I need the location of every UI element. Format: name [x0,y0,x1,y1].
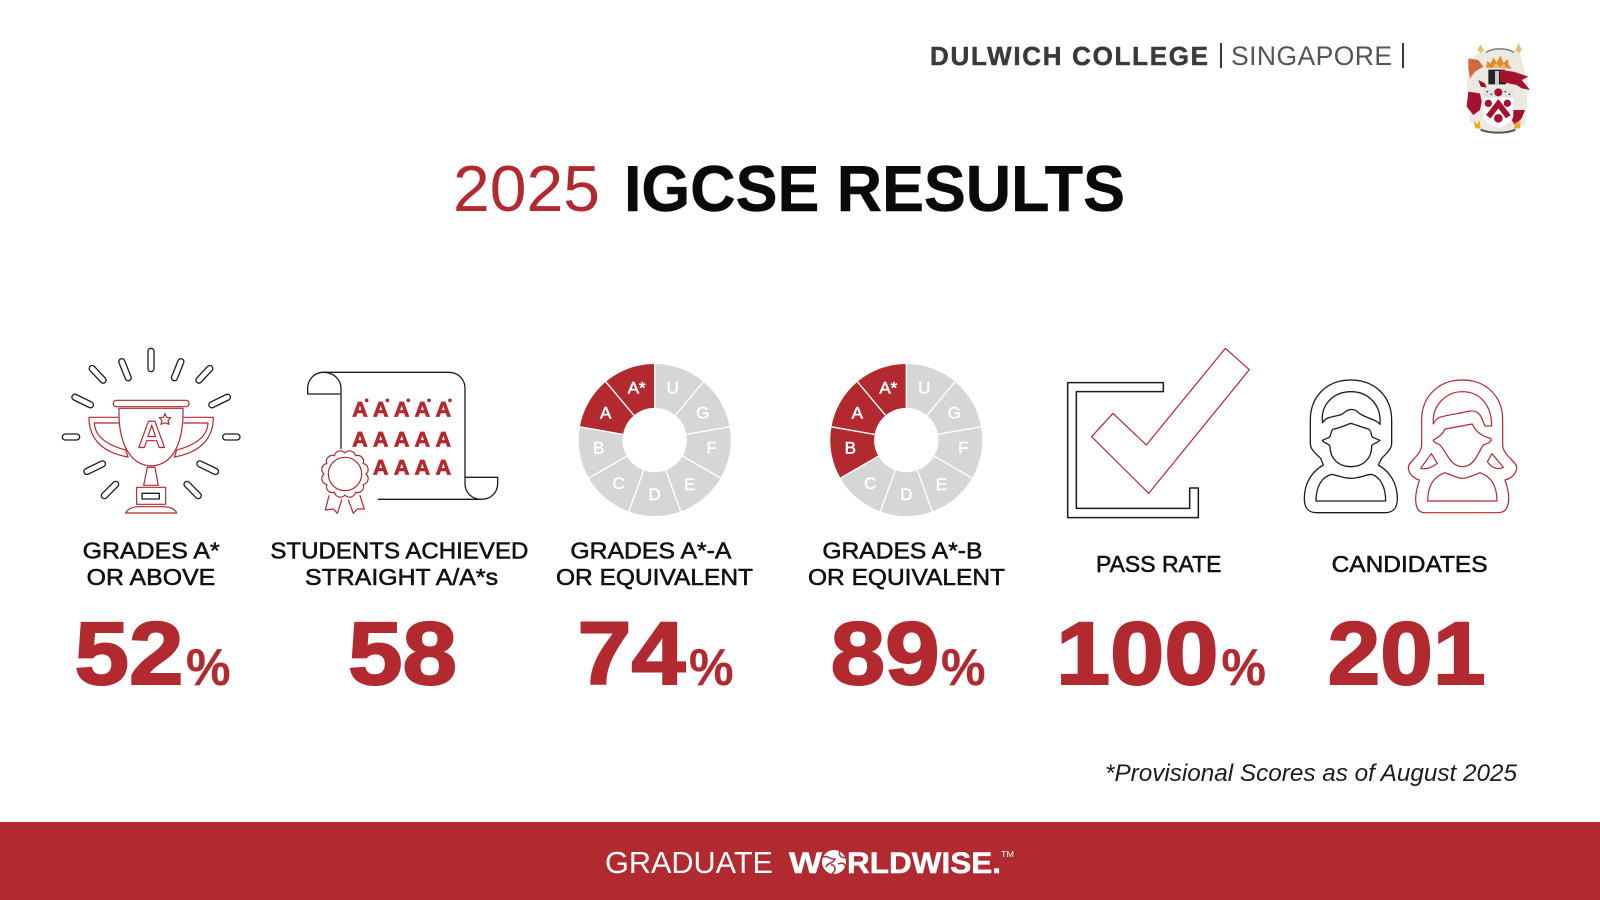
grid of A grades: A [352,428,368,452]
grid of A grades: A [373,398,388,422]
value: 89% [831,603,986,703]
label: students achieved straight A/A*s: STRAIGHT A/A*s [305,564,498,590]
chart: grade wheel A*, A and B highlighted: D [900,485,912,504]
header wordmark: Dulwich College Singapore: SINGAPORE [1231,41,1392,71]
chart: grade wheel A* and A highlighted: A [600,404,612,422]
chart: grade wheel A*, A and B highlighted: A [852,404,864,422]
value: 89%: 89 [831,603,940,703]
icon: male student [1304,380,1397,513]
grid of A grades: A [373,455,388,479]
rosette [322,451,368,513]
grid of A grades: A [436,398,451,422]
value: 100%: % [1221,639,1266,697]
footnote: *Provisional Scores as of August 2025 [1105,760,1518,787]
chart: grade wheel A* and A highlighted: D [649,485,661,504]
chart: grade wheel A* and A highlighted: B [593,438,604,458]
label: grades A* or above [83,538,220,590]
header wordmark: Dulwich College Singapore: DULWICH COLLEGE [930,41,1208,71]
grid of A grades: A [415,428,430,452]
value: 100%: 100 [1056,603,1218,703]
footer band: Graduate Worldwise [0,822,1600,900]
grid of A grades: A [436,428,451,452]
column: students achieved straight A/A*s [270,372,528,703]
column: pass rate [1056,348,1266,703]
label: grades A*-A or equivalent: GRADES A*-A [570,538,732,564]
icon: trophy with rays [62,348,240,513]
value: 201: 201 [1328,603,1486,703]
chart: grade wheel A* and A highlighted [578,363,731,517]
icon: school crest [1467,43,1530,133]
label: grades A*-A or equivalent [556,538,753,590]
chart: grade wheel A* and A highlighted: E [684,475,695,494]
icon: trophy with rays: A [138,413,166,456]
column: candidates [1304,380,1517,703]
value: 74%: % [689,639,734,697]
label: students achieved straight A/A*s: STUDENTS ACHIEVED [270,538,528,564]
title: 2025 [453,152,600,225]
grid of A grades: A [436,455,451,479]
label: grades A*-B or equivalent [808,538,1005,590]
chart: grade wheel A*, A and B highlighted: A* [879,378,898,398]
chart: grade wheel A* and A highlighted: F [707,438,717,458]
icon: female student [1408,380,1517,513]
value: 74% [578,603,734,703]
footer band: Graduate Worldwise: RLDWISE. [847,847,1001,880]
grid of A grades: A [352,398,368,422]
chart: grade wheel A* and A highlighted: C [613,474,625,493]
value: 52% [74,603,231,703]
column: grades A*-B or equivalent [808,363,1005,703]
chart: grade wheel A*, A and B highlighted: F [958,438,968,458]
grid of A grades: A [373,428,388,452]
icon: male and female students [1304,380,1517,513]
value: 52%: 52 [74,603,184,703]
icon: diploma scroll with rosette [308,372,498,513]
grid of A grades: A [394,428,409,452]
label: grades A* or above: OR ABOVE [87,564,215,590]
column: grades A*-A or equivalent [556,363,753,703]
value: 74%: 74 [578,603,686,703]
icon: check mark in box [1068,348,1249,518]
grid of A grades: A [415,398,430,422]
label: grades A* or above: GRADES A* [83,538,220,564]
icon: globe [822,850,846,874]
footer band: Graduate Worldwise: GRADUATE [605,845,773,880]
chart: grade wheel A*, A and B highlighted: E [936,475,947,494]
chart: grade wheel A* and A highlighted: A* [628,378,646,398]
label: grades A*-A or equivalent: OR EQUIVALENT [556,564,753,590]
title: IGCSE RESULTS [624,152,1125,225]
grid of A grades: A [415,455,430,479]
footer band: Graduate Worldwise: TM [1001,850,1014,859]
label: students achieved straight A/A*s [270,538,528,590]
grid of A grades: A [394,398,409,422]
value: 58: 58 [348,603,457,703]
chart: grade wheel A* and A highlighted: G [696,404,709,422]
grid of A grades [352,398,452,479]
header wordmark: Dulwich College Singapore [930,41,1404,71]
footer band: Graduate Worldwise: W [789,847,823,880]
label: grades A*-B or equivalent: OR EQUIVALENT [808,564,1005,590]
chart: grade wheel A*, A and B highlighted [830,363,983,517]
value: 52%: % [186,639,231,697]
label: grades A*-B or equivalent: GRADES A*-B [822,538,982,564]
chart: grade wheel A*, A and B highlighted: C [864,474,876,493]
chart: grade wheel A*, A and B highlighted: B [845,438,856,458]
column: grades A* or above [62,348,240,703]
label: candidates: CANDIDATES [1332,551,1488,577]
chart: grade wheel A*, A and B highlighted: G [948,404,961,422]
chart: grade wheel A*, A and B highlighted: U [918,378,930,398]
label: pass rate: PASS RATE [1096,551,1222,577]
grid of A grades: A [394,455,409,479]
chart: grade wheel A* and A highlighted: U [667,378,679,398]
value: 89%: % [941,639,986,697]
